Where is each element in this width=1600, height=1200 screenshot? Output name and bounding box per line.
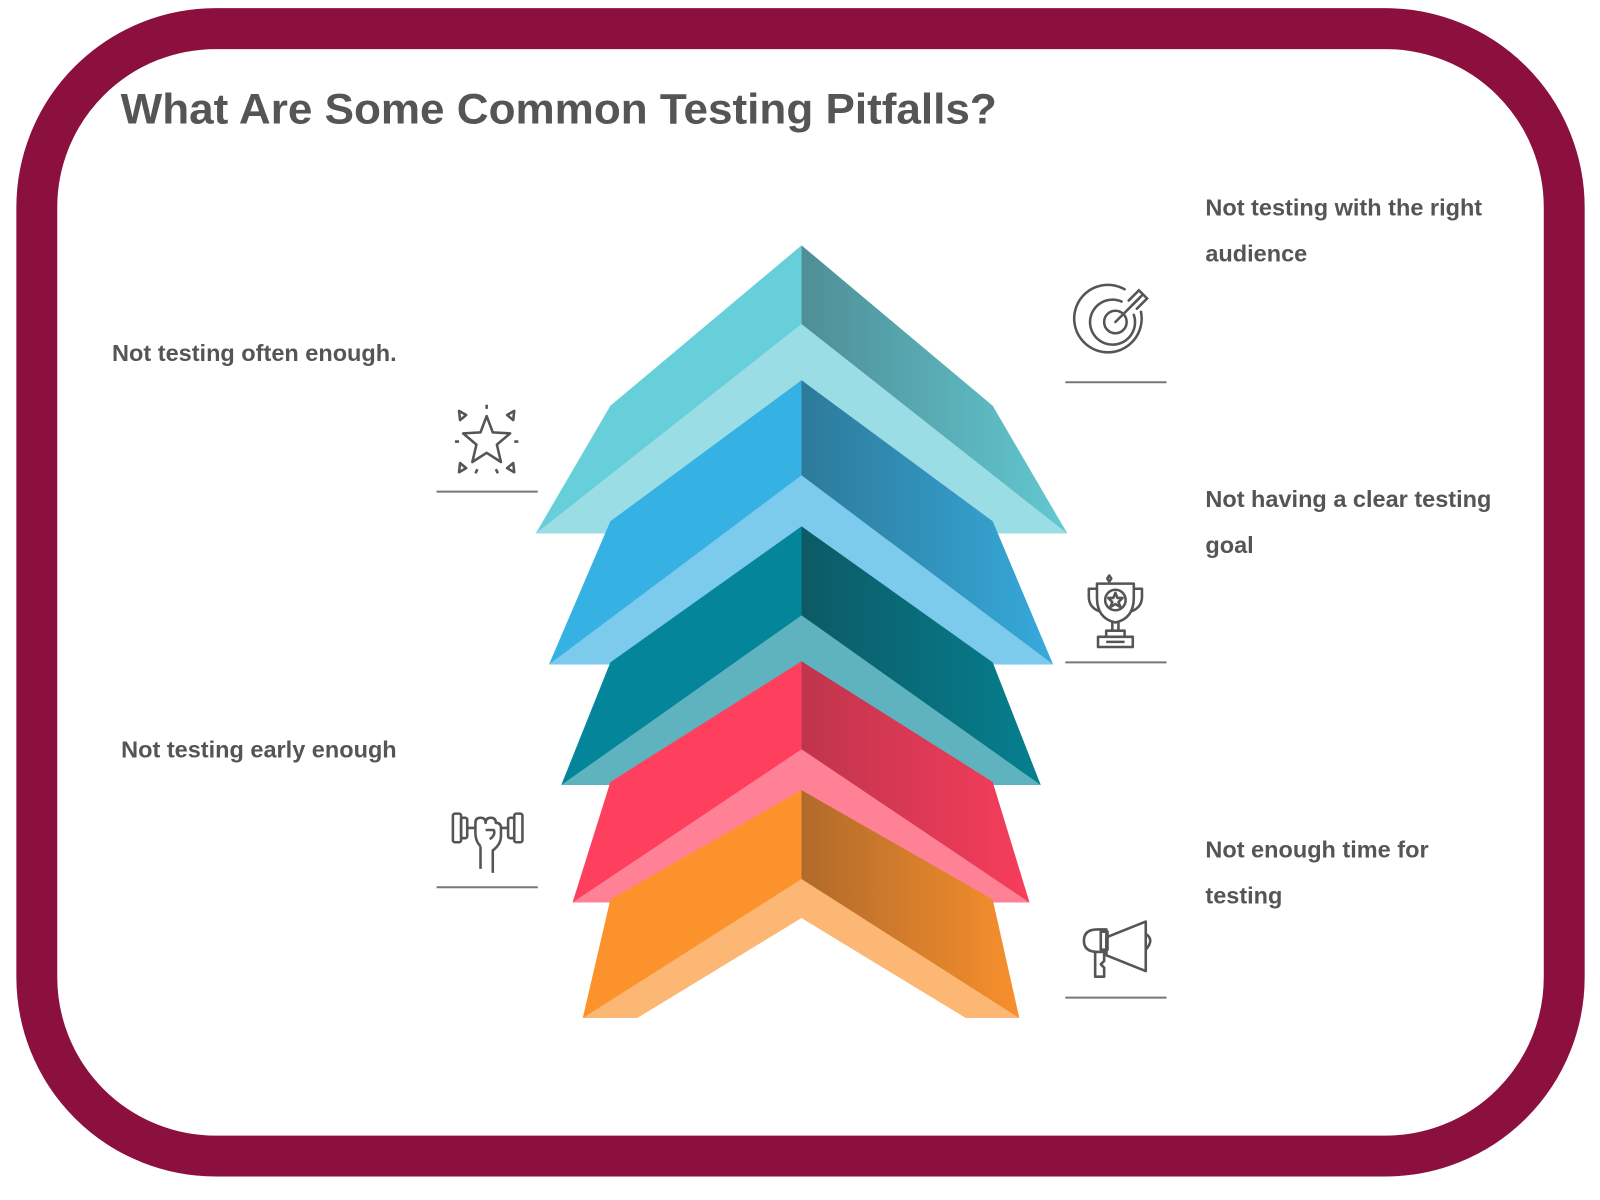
label: time: Not enough time for — [1205, 837, 1429, 863]
icon: dumbbell — [453, 814, 522, 873]
label: right audience: Not testing with the right — [1205, 195, 1482, 221]
label: not testing often enough: Not testing often enough. — [112, 340, 397, 366]
layer 4: red — [573, 661, 1030, 903]
icon: megaphone — [1084, 922, 1150, 977]
layer 5: orange — [583, 790, 1019, 1018]
label: right audience: audience — [1205, 241, 1307, 267]
icon: target — [1074, 285, 1147, 352]
label: time: testing — [1205, 883, 1282, 909]
chevron stack — [536, 245, 1067, 1018]
label: clear goal: Not having a clear testing — [1205, 486, 1491, 512]
layer 2: blue — [549, 380, 1053, 664]
icon: trophy — [1089, 575, 1142, 647]
layer 3: dark teal — [561, 526, 1041, 785]
label: right audience — [1205, 195, 1482, 267]
label: not testing early enough: Not testing early enough — [121, 736, 397, 762]
title: What Are Some Common Testing Pitfalls? — [121, 86, 997, 134]
icon: star — [455, 405, 518, 473]
label: clear goal: goal — [1205, 532, 1254, 558]
label: time — [1205, 837, 1429, 909]
layer 1: teal — [536, 245, 1067, 534]
label: clear goal — [1205, 486, 1491, 558]
